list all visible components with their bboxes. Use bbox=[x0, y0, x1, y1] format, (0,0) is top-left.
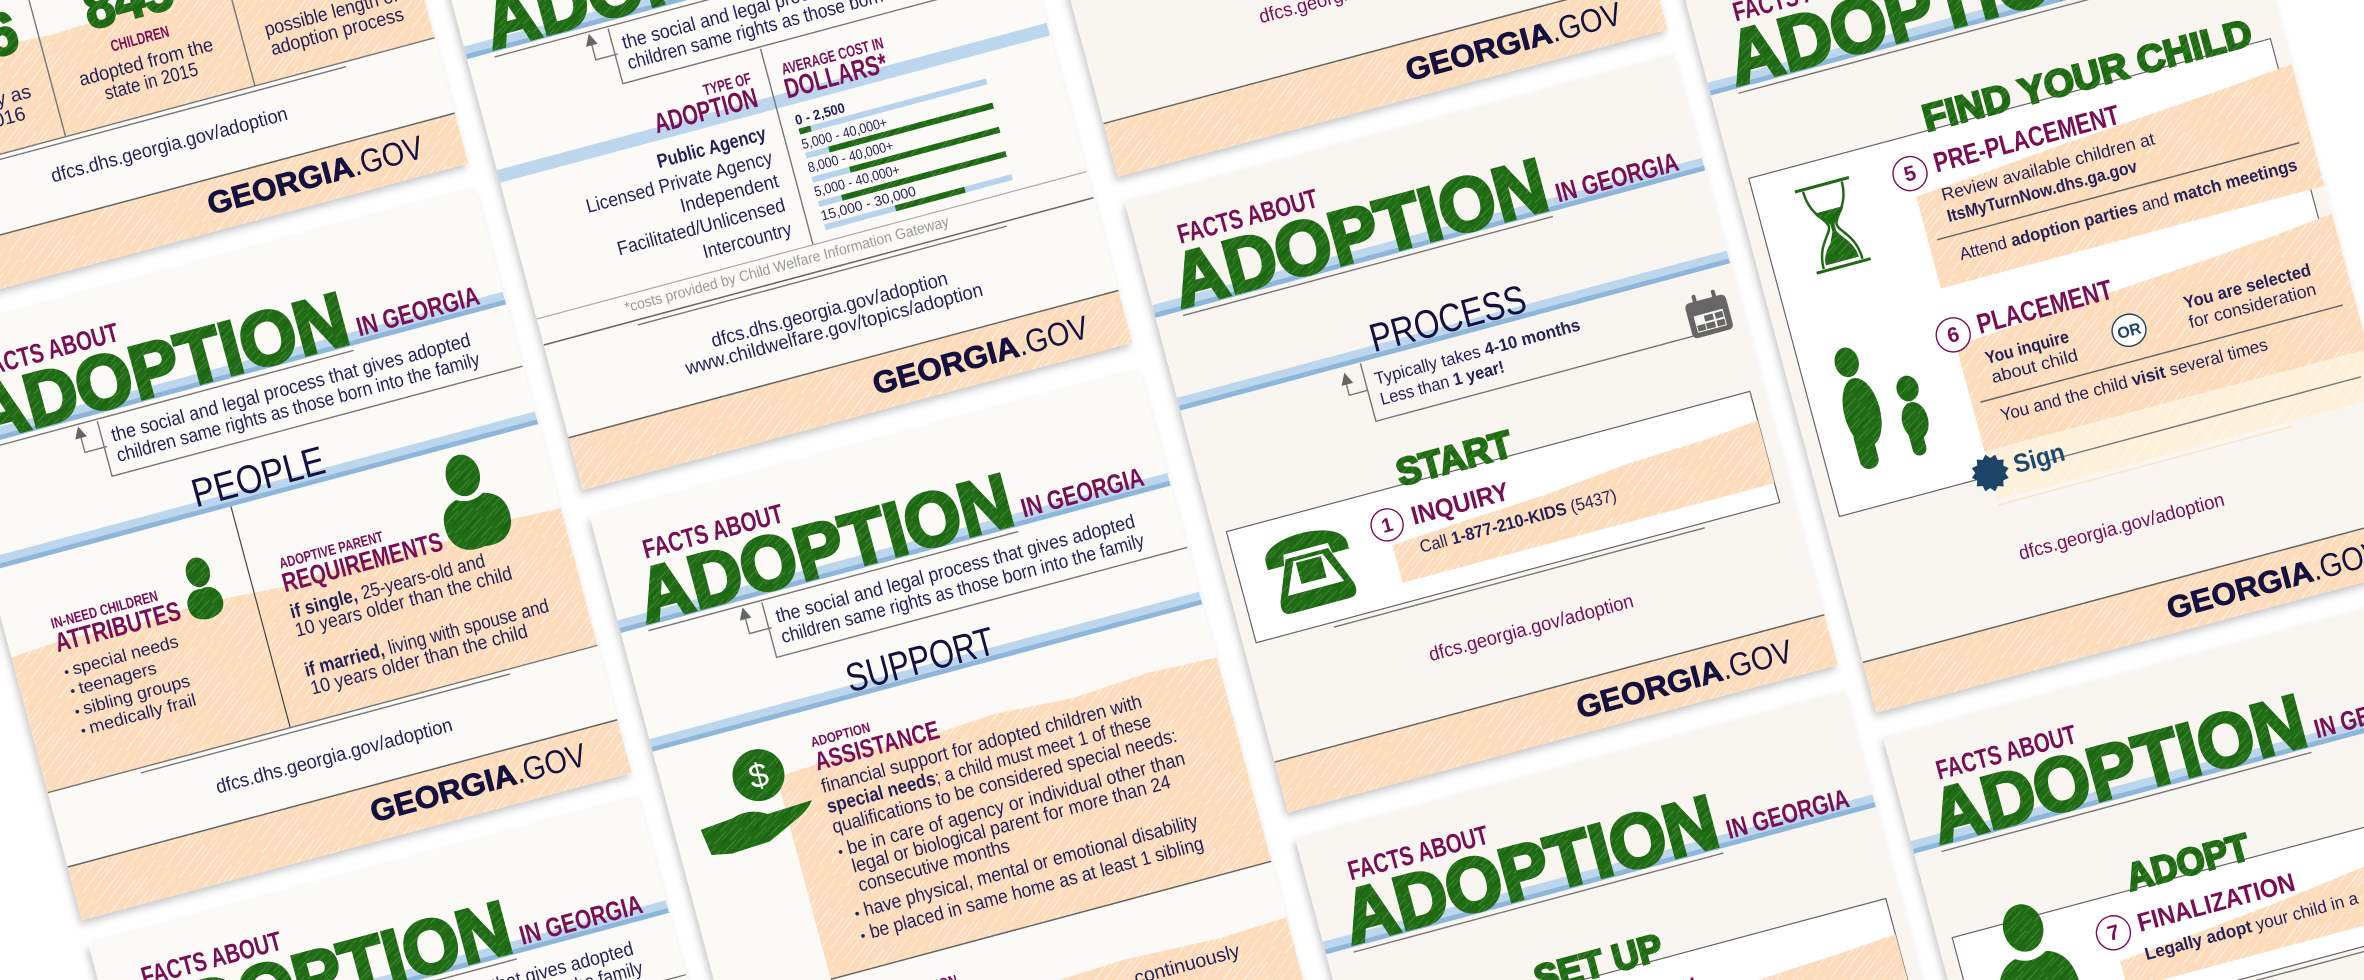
assistance list bbox=[835, 748, 1210, 946]
assistance heading: ASSISTANCE bbox=[811, 714, 943, 777]
step number 5 bbox=[1889, 153, 1931, 194]
assistance description: qualifications to be considered special needs: bbox=[830, 725, 1179, 838]
title underline bbox=[147, 959, 517, 980]
step number 5: 5 bbox=[1902, 161, 1919, 187]
arrow bbox=[737, 602, 772, 635]
blue bar bbox=[464, 0, 1017, 59]
card background bbox=[1295, 691, 1924, 980]
children list: • bbox=[73, 703, 82, 720]
definition box: children same rights as those born into the family bbox=[114, 349, 482, 467]
requirements married: 10 years older than the child bbox=[308, 620, 530, 700]
arrow bbox=[583, 28, 618, 61]
children list: • bbox=[79, 722, 88, 739]
adoption types: Licensed Private Agency bbox=[584, 147, 775, 218]
card background bbox=[0, 0, 468, 311]
bar: licensed private: 5,000 - 40,000+ bbox=[800, 114, 889, 152]
icon: hourglass bbox=[1795, 178, 1871, 273]
title underline bbox=[648, 532, 1018, 631]
footer logo bbox=[2162, 533, 2364, 626]
column divider bbox=[761, 49, 813, 245]
peach section bbox=[11, 506, 597, 793]
footer logo bbox=[1572, 632, 1796, 725]
blue bar bbox=[1911, 694, 2364, 854]
title suffix: IN GEORGIA bbox=[516, 889, 646, 951]
pale sign band bbox=[1985, 349, 2364, 500]
arrow bbox=[1338, 368, 1368, 397]
placement option two: for consideration bbox=[2186, 279, 2318, 332]
footnote: *costs provided by Child Welfare Information Gateway bbox=[623, 213, 951, 316]
requirements heading: ADOPTIVE PARENT bbox=[277, 528, 385, 573]
definition box: the social and legal process that gives adopted bbox=[109, 329, 473, 447]
bar: public agency: 0 - 2,500 bbox=[793, 99, 847, 128]
pre-placement text: Review available children at bbox=[1939, 128, 2157, 205]
blue bar bbox=[1152, 158, 1705, 318]
title: ADOPTION bbox=[1334, 779, 1727, 961]
header bbox=[1688, 0, 2264, 109]
or badge: OR bbox=[2116, 320, 2144, 343]
step title: START bbox=[1392, 424, 1517, 495]
white step box bbox=[1952, 798, 2364, 980]
title: ADOPTION bbox=[1163, 143, 1556, 324]
assistance list: be placed in same home as at least 1 sibling bbox=[867, 833, 1206, 943]
footer logo bbox=[366, 736, 590, 829]
step number: 1 bbox=[1379, 514, 1396, 538]
panel: find your child bbox=[1680, 0, 2364, 713]
placement option two: You are selected bbox=[2181, 260, 2313, 313]
bar: independent bbox=[806, 109, 1000, 183]
white step box bbox=[1226, 391, 1780, 643]
panel: lower left card bbox=[88, 797, 688, 980]
peach strip bbox=[2111, 827, 2364, 980]
children list: medically frail bbox=[87, 690, 198, 737]
card background bbox=[1883, 590, 2364, 980]
divider bbox=[1981, 305, 2343, 402]
step heading: INQUIRY bbox=[1408, 476, 1512, 531]
panel: top centre card bbox=[1051, 0, 1667, 177]
footer logo: .GOV bbox=[1717, 632, 1796, 687]
box border bbox=[1362, 899, 1910, 980]
header bbox=[1891, 620, 2364, 867]
footer band bbox=[1104, 0, 1667, 177]
requirements single: if single, 25-years-old and bbox=[288, 550, 487, 623]
box bottom border over band bbox=[2049, 377, 2361, 460]
bar: intercountry bbox=[819, 158, 1013, 230]
header bbox=[598, 400, 1174, 646]
section bar bbox=[497, 23, 1050, 183]
statistic note fragment bbox=[0, 80, 39, 141]
section title: PEOPLE bbox=[187, 439, 330, 516]
border line bbox=[544, 198, 1093, 345]
title: ADOPTION bbox=[629, 458, 1022, 639]
assistance description: special needs; a child must meet 1 of these bbox=[824, 710, 1154, 818]
title: ADOPTION bbox=[1922, 679, 2315, 860]
section title: PROCESS bbox=[1365, 277, 1531, 361]
peach strip bbox=[1386, 420, 1775, 583]
website link: dfcs.dhs.georgia.gov/adoption bbox=[49, 103, 290, 187]
title kicker: FACTS ABOUT bbox=[1345, 820, 1492, 886]
duration note box: Typically takes 4-10 months bbox=[1372, 314, 1583, 389]
peach strip bbox=[1524, 934, 1910, 980]
title suffix: IN GEORGIA bbox=[353, 281, 483, 342]
card background bbox=[0, 188, 632, 920]
website link: dfcs.dhs.georgia.gov/adoption bbox=[213, 714, 455, 798]
bar: public agency bbox=[793, 62, 987, 135]
title underline bbox=[0, 350, 354, 450]
definition box: the social and legal process that gives adopted bbox=[773, 510, 1137, 628]
assistance list: have physical, mental or emotional disability bbox=[861, 810, 1200, 921]
title suffix: IN GEORGIA bbox=[1723, 783, 1852, 845]
footer logo: .GOV bbox=[348, 128, 427, 183]
divider bbox=[1937, 143, 2299, 240]
or badge bbox=[2108, 310, 2150, 350]
title kicker: FACTS ABOUT bbox=[1933, 719, 2080, 786]
children list: teenagers bbox=[76, 658, 159, 698]
section border bbox=[48, 645, 597, 793]
divider left bbox=[26, 0, 66, 137]
footer logo bbox=[1401, 0, 1625, 88]
footer logo bbox=[203, 128, 427, 222]
title kicker: FACTS ABOUT bbox=[639, 498, 787, 565]
assistance description: financial support for adopted children with bbox=[819, 691, 1144, 798]
definition box bbox=[72, 311, 523, 483]
arrow bbox=[72, 420, 107, 454]
header bbox=[96, 827, 673, 980]
children heading: IN-NEED CHILDREN bbox=[49, 588, 160, 633]
pale underline bbox=[1999, 426, 2292, 505]
placement visit: You and the child visit several times bbox=[1998, 334, 2270, 425]
icon: person bbox=[1978, 894, 2088, 980]
panel: support bbox=[590, 370, 1305, 980]
assistance list: be in care of agency or individual other than bbox=[845, 748, 1187, 859]
definition box: children same rights as those born into the family bbox=[779, 530, 1147, 648]
placement option one: You inquire bbox=[1983, 326, 2071, 368]
peach block: assistance bbox=[775, 655, 1271, 979]
header bbox=[444, 0, 1020, 73]
panel: costs bbox=[436, 0, 1132, 490]
children list: • bbox=[62, 663, 71, 680]
statistic note: adopted from the bbox=[77, 34, 216, 91]
assistance heading: ADOPTION bbox=[809, 719, 872, 750]
bar: facilitated: 5,000 - 40,000+ bbox=[812, 161, 901, 199]
children label: CHILDREN bbox=[109, 24, 171, 56]
placement heading: PLACEMENT bbox=[1973, 274, 2116, 340]
adoption type heading: TYPE OF bbox=[701, 71, 753, 100]
website links: www.childwelfare.gov/topics/adoption bbox=[682, 279, 985, 380]
card background bbox=[1680, 0, 2364, 713]
panel: adopt bbox=[1883, 590, 2364, 980]
step number bbox=[1368, 505, 1407, 544]
title suffix: IN GEORGIA bbox=[1018, 462, 1147, 523]
icon: adult and child bbox=[1827, 331, 1937, 472]
step text: Call 1-877-210-KIDS (5437) bbox=[1417, 485, 1619, 557]
website links: dfcs.dhs.georgia.gov/adoption bbox=[709, 268, 950, 352]
blue bar bbox=[1323, 794, 1876, 954]
underline bbox=[638, 226, 1007, 325]
icon: calendar bbox=[1682, 287, 1734, 339]
children list bbox=[61, 631, 198, 740]
underline bbox=[2058, 934, 2364, 980]
pre-placement text: ItsMyTurnNow.dhs.ga.gov bbox=[1945, 156, 2139, 226]
adoption types: Intercountry bbox=[700, 218, 794, 263]
assistance list: consecutive months bbox=[856, 835, 1012, 897]
sign label: Sign bbox=[2010, 437, 2068, 479]
adoption types: Facilitated/Unlicensed bbox=[615, 194, 788, 260]
requirements married: if married, living with spouse and bbox=[302, 595, 551, 682]
blue bar bbox=[1708, 0, 2261, 95]
bar: licensed private bbox=[800, 86, 994, 159]
footer logo bbox=[868, 308, 1092, 401]
adoption types: Public Agency bbox=[655, 123, 769, 173]
footer logo: GEORGIA bbox=[1573, 653, 1727, 725]
children list: sibling groups bbox=[81, 670, 192, 718]
adoption types bbox=[577, 123, 795, 289]
duration note box bbox=[1337, 278, 1695, 427]
step number: 7 bbox=[2105, 921, 2122, 946]
step title: ADOPT bbox=[2122, 827, 2254, 900]
process length note: adoption process bbox=[268, 3, 406, 60]
title underline bbox=[495, 0, 865, 57]
footer band bbox=[68, 720, 632, 920]
children heading: ATTRIBUTES bbox=[52, 596, 184, 658]
peach block: pre-placement bbox=[1908, 64, 2324, 289]
statistic note: state in 2015 bbox=[102, 59, 201, 105]
footer logo: .GOV bbox=[511, 736, 590, 790]
panel: statistics card bbox=[0, 0, 468, 311]
underline bbox=[141, 674, 510, 773]
children list: • bbox=[68, 682, 77, 699]
footer band bbox=[1275, 615, 1838, 812]
card background bbox=[590, 370, 1305, 980]
assistance list: • bbox=[836, 843, 845, 860]
card background bbox=[1051, 0, 1667, 177]
panel: set up bbox=[1295, 691, 1924, 980]
pre-placement heading: PRE-PLACEMENT bbox=[1930, 99, 2123, 178]
blue bar bbox=[618, 473, 1171, 633]
children list: special needs bbox=[70, 631, 181, 679]
footer logo: GEORGIA bbox=[1402, 15, 1556, 88]
section title: SUPPORT bbox=[841, 619, 999, 701]
duration note box: Less than 1 year! bbox=[1378, 357, 1507, 409]
step number 6 bbox=[1932, 314, 1974, 356]
band border line bbox=[0, 38, 435, 185]
assistance list: • bbox=[853, 905, 862, 922]
peach statistics band bbox=[0, 0, 435, 185]
assistance list: • bbox=[859, 927, 868, 944]
pre-placement meetings: Attend adoption parties and match meetings bbox=[1957, 154, 2300, 264]
header bbox=[1133, 84, 1709, 331]
adoption types: Independent bbox=[678, 170, 782, 217]
divider right bbox=[215, 0, 255, 86]
cost heading: DOLLARS* bbox=[781, 47, 890, 104]
bar: intercountry: 15,000 - 30,000 bbox=[819, 183, 918, 224]
requirements single: 10 years older than the child bbox=[293, 562, 515, 642]
footer band bbox=[0, 113, 468, 311]
underline bbox=[0, 67, 346, 190]
white step box bbox=[1749, 39, 2361, 517]
section bar bbox=[1177, 251, 1730, 410]
peach block: second support bbox=[846, 916, 1305, 980]
panel: process bbox=[1125, 55, 1838, 812]
requirements heading: REQUIREMENTS bbox=[279, 527, 446, 598]
title kicker: FACTS ABOUT bbox=[1174, 183, 1321, 250]
adoption type heading: ADOPTION bbox=[650, 82, 761, 139]
block border bbox=[831, 861, 1271, 979]
icon: hand with coin: $ bbox=[745, 755, 773, 797]
section bar bbox=[649, 592, 1202, 752]
placement option one bbox=[1983, 325, 2080, 387]
definition box bbox=[737, 492, 1187, 664]
step title: FIND YOUR CHILD bbox=[1918, 12, 2257, 141]
website link: dfcs.georgia.gov/adoption bbox=[1426, 590, 1636, 666]
footer logo: GEORGIA bbox=[366, 756, 520, 829]
cost heading: AVERAGE COST IN bbox=[780, 35, 886, 79]
step number 6: 6 bbox=[1945, 323, 1962, 348]
cost range chart bbox=[793, 62, 1013, 230]
footer logo: GEORGIA bbox=[204, 149, 357, 222]
header bbox=[1303, 721, 1879, 968]
title underline bbox=[1354, 853, 1723, 952]
step text: Legally adopt your child in a bbox=[2143, 888, 2360, 964]
peach block: placement bbox=[1948, 214, 2364, 452]
icon: seal bbox=[1967, 450, 2014, 496]
icon: child bbox=[176, 553, 227, 623]
icon: adult bbox=[428, 446, 516, 555]
bar: facilitated bbox=[812, 134, 1007, 207]
icon: telephone bbox=[1261, 522, 1361, 617]
card background bbox=[436, 0, 1132, 490]
website link: dfcs.georgia.gov/adoption bbox=[2016, 489, 2227, 565]
table border bbox=[537, 172, 1086, 319]
assistance list: legal or biological parent for more than 24 bbox=[850, 771, 1173, 878]
step heading: FINALIZATION bbox=[2134, 867, 2298, 938]
title underline bbox=[1942, 752, 2311, 852]
title underline bbox=[1738, 0, 2108, 93]
section bar bbox=[0, 412, 538, 571]
white step box bbox=[1362, 899, 1910, 980]
footer logo: .GOV bbox=[1013, 308, 1092, 363]
panel: people bbox=[0, 188, 632, 920]
footer band bbox=[1863, 515, 2364, 713]
card background bbox=[1125, 55, 1838, 812]
placement option one: about child bbox=[1989, 345, 2080, 387]
step number bbox=[2093, 912, 2134, 954]
title underline bbox=[1183, 216, 1553, 316]
blue bar bbox=[0, 292, 506, 452]
footer logo: GEORGIA bbox=[869, 329, 1023, 401]
underline bbox=[1334, 528, 1705, 627]
title suffix: IN GEORGIA bbox=[1552, 147, 1682, 208]
footer band bbox=[569, 290, 1132, 490]
footer logo: GEORGIA bbox=[2163, 554, 2317, 626]
bar: independent: 8,000 - 40,000+ bbox=[806, 137, 895, 175]
header bbox=[0, 218, 510, 465]
card background bbox=[88, 797, 688, 980]
column divider bbox=[231, 506, 290, 728]
icon: hand with coin bbox=[684, 738, 820, 860]
blue bar bbox=[116, 900, 669, 980]
